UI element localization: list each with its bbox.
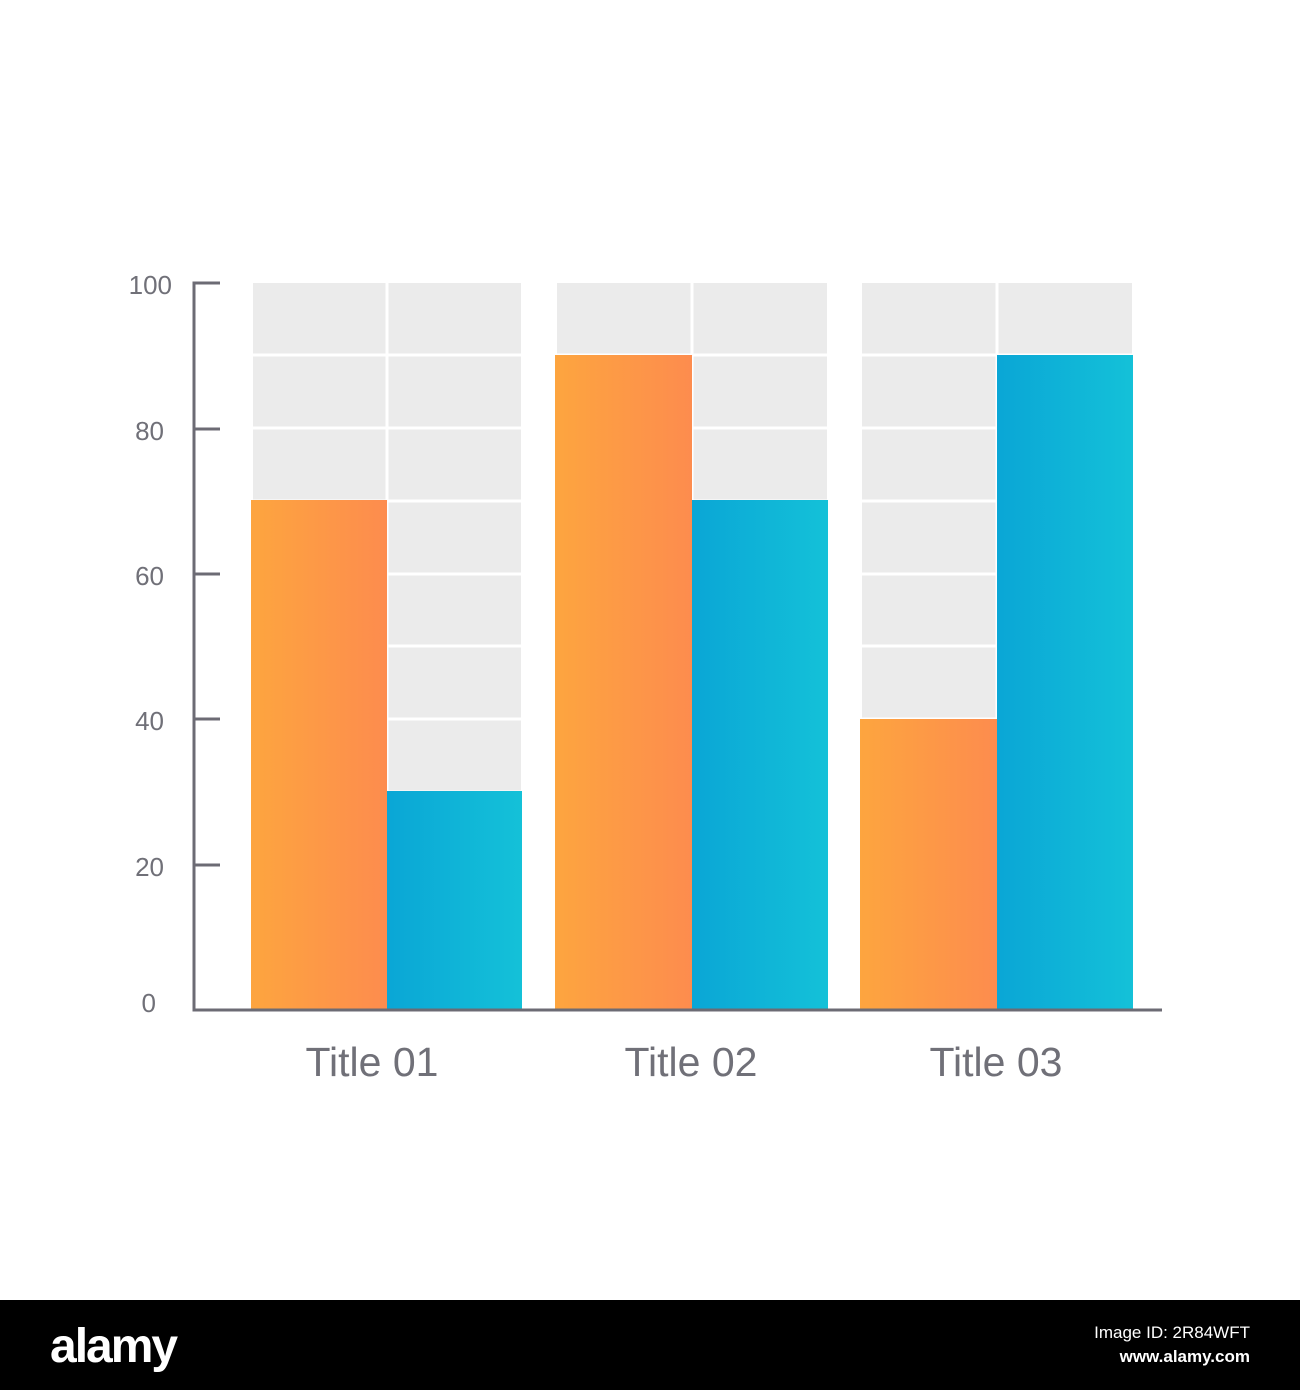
footer banner: Image ID: 2R84WFT (1094, 1323, 1250, 1342)
y-axis labels: 80 (135, 416, 164, 446)
x-axis labels (306, 1039, 1062, 1085)
bars: Title 03 (860, 355, 1133, 1010)
y-axis labels: 20 (135, 852, 164, 882)
y-axis labels: 0 (142, 988, 156, 1018)
footer banner: alamy (50, 1320, 178, 1373)
axes (194, 283, 1162, 1010)
bars: Title 01 (251, 500, 522, 1010)
x-axis labels: Title 01 (306, 1039, 438, 1085)
y-axis labels (129, 270, 172, 1018)
y-axis labels: 60 (135, 561, 164, 591)
bars: Title 02 (555, 355, 828, 1010)
x-axis labels: Title 03 (930, 1039, 1062, 1085)
x-axis labels: Title 02 (625, 1039, 757, 1085)
footer banner: www.alamy.com (1119, 1347, 1250, 1366)
footer banner (0, 1300, 1300, 1390)
grid backgrounds (253, 283, 1132, 1010)
y-axis labels: 100 (129, 270, 172, 300)
y-axis labels: 40 (135, 706, 164, 736)
